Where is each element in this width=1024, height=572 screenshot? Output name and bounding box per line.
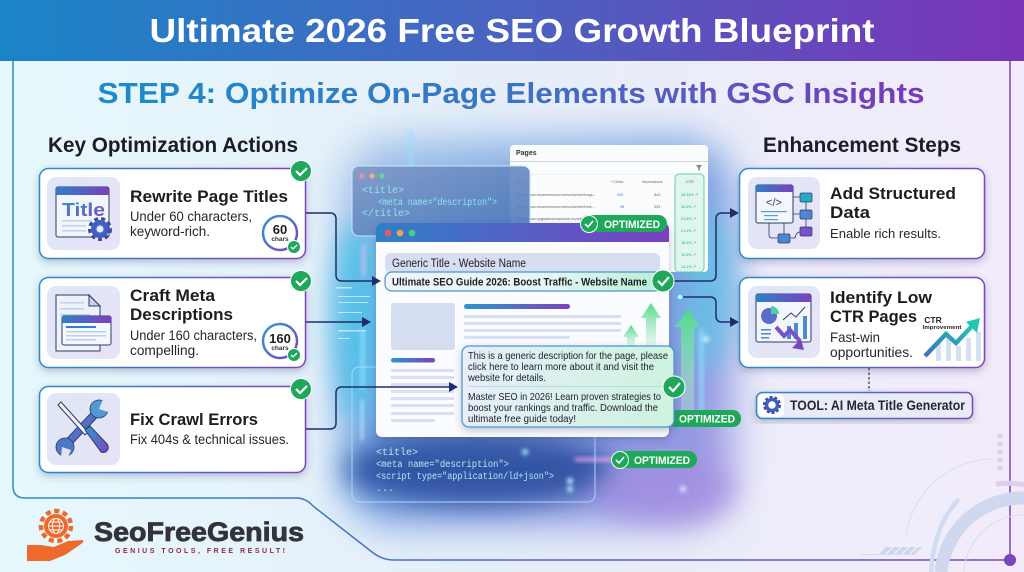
panel: GSC pages table: Pages [516, 150, 537, 157]
icon: wrench and screwdriver [47, 393, 120, 465]
generic title row [385, 253, 660, 273]
panel: bottom code editor: <meta name="description"> [376, 459, 509, 471]
panel: craft meta descriptions: Under 160 characters, [130, 327, 257, 343]
header banner [0, 0, 1024, 61]
badge: 60 chars [263, 216, 300, 254]
callout: meta description: Master SEO in 2026! Learn proven strategies to [468, 391, 661, 403]
growth arrows [623, 303, 700, 410]
check: card 1 [290, 160, 312, 182]
callout: meta description: click here to learn more about it and visit the [468, 361, 654, 373]
icon: gear [764, 397, 780, 413]
heading: key optimization actions: Key Optimization Actions [48, 134, 298, 157]
content wireframe [391, 303, 621, 422]
panel: GSC pages table: 21.1% ↗ [681, 229, 696, 233]
panel: fix crawl errors [40, 386, 306, 472]
panel: bottom code editor: ... [376, 484, 394, 495]
panel: GSC pages table: https://www.dreamzemcommerce/article/best... [516, 205, 595, 209]
panel: craft meta descriptions: Descriptions [130, 305, 233, 324]
decorative corner arcs [906, 459, 1024, 572]
badge: 60 chars: chars [271, 236, 289, 243]
check: card 3 [290, 378, 312, 400]
pill: optimized top: OPTIMIZED [604, 219, 660, 231]
logo: SeoFreeGenius [27, 511, 304, 561]
card text: Fix Crawl Errors [130, 410, 258, 429]
connector arrows [306, 213, 732, 429]
badge: 160 chars [263, 324, 300, 362]
card text: Craft Meta [130, 286, 216, 305]
panel: identify low CTR pages [740, 278, 984, 368]
icon: analytics window [748, 286, 820, 358]
check: description [663, 376, 685, 398]
panel: GSC pages table: 13.1% ↗ [681, 265, 696, 269]
panel: GSC pages table: CTR [686, 180, 694, 184]
panel: add structured data: Data [830, 203, 871, 222]
callout: meta description: This is a generic description for the page, please [468, 350, 668, 362]
icon: code flow diagram: </> [766, 197, 782, 209]
chart: CTR improvement: CTR [924, 315, 942, 325]
callout: meta description [462, 346, 674, 427]
icon: title window with gear: Title [62, 200, 105, 220]
panel: GSC pages table [510, 145, 708, 272]
panel: add structured data [740, 168, 984, 258]
panel: bottom code editor: <title> [376, 447, 418, 459]
logo: SeoFreeGenius: GENIUS TOOLS, FREE RESULT! [115, 548, 285, 555]
check: card 2 [290, 270, 312, 292]
data dots left of window [336, 287, 370, 339]
pill: optimized middle [668, 410, 741, 427]
pill: optimized middle: OPTIMIZED [679, 414, 735, 426]
panel: rewrite page titles [40, 168, 306, 258]
panel: top code editor: <title> [362, 185, 404, 197]
icon: title window with gear [47, 177, 120, 250]
callout: meta description: ultimate free guide today! [468, 413, 576, 425]
panel: GSC pages table: 15.5% ↗ [681, 253, 696, 257]
badge: 60 chars: 60 [273, 222, 287, 237]
panel: GSC pages table: 553 [654, 205, 660, 209]
panel: GSC pages table: URLs [516, 180, 526, 184]
panel: craft meta descriptions [40, 278, 306, 368]
panel: top code editor: <meta name="descripton"> [378, 197, 497, 209]
panel: bottom code editor: <script type="application/ld+json"> [376, 471, 554, 483]
callout: meta description: website for details. [467, 372, 546, 384]
card text: Identify Low [830, 288, 933, 307]
panel: rewrite page titles: Under 60 characters, [130, 208, 252, 224]
panel: GSC pages table: + Clicks [610, 180, 623, 184]
generic title row: Generic Title - Website Name [392, 258, 526, 270]
tool pill [756, 392, 972, 418]
chart: CTR improvement: Improvement [922, 325, 962, 331]
panel: identify low CTR pages: CTR Pages [830, 307, 917, 326]
chart: CTR improvement [922, 315, 981, 361]
panel: GSC pages table: https://www.upgradedomainsore.eu/article... [516, 217, 590, 221]
panel: top code editor [352, 166, 530, 236]
pill: optimized top [580, 215, 667, 232]
dotted link to tool [868, 368, 870, 391]
callout: meta description: boost your rankings and traffic. Download the [468, 402, 658, 414]
panel: GSC pages table: 98 [620, 205, 624, 209]
frame corner dot [1004, 554, 1016, 566]
icon: document with window [47, 286, 120, 359]
icon: open hand [27, 540, 83, 561]
panel: bottom code editor [352, 367, 595, 502]
badge: 160 chars: chars [271, 345, 289, 352]
card text: Add Structured [830, 184, 956, 203]
logo: SeoFreeGenius: SeoFreeGenius [94, 517, 304, 547]
panel: top code editor: </title> [362, 208, 410, 220]
central glow [332, 130, 735, 525]
heading: enhancement steps: Enhancement Steps [763, 134, 961, 157]
panel: GSC pages table: 24.8% ↗ [681, 217, 696, 221]
optimized title row: Ultimate SEO Guide 2026: Boost Traffic - Website Name [392, 276, 647, 288]
panel: GSC pages table: 18.5% ↗ [681, 241, 696, 245]
panel: GSC pages table: 843 [654, 193, 660, 197]
check: title row [652, 270, 674, 292]
connector node [677, 294, 683, 300]
decorative dots [997, 433, 1003, 471]
panel: rewrite page titles: keyword-rich. [130, 223, 210, 239]
badge: 160 chars: 160 [269, 331, 291, 346]
panel: fix crawl errors: Fix 404s & technical issues. [130, 431, 289, 447]
panel: browser window [376, 223, 669, 437]
icon: code flow diagram [748, 177, 820, 249]
panel: GSC pages table: 28.34% ↗ [681, 193, 698, 197]
subtitle: STEP 4: Optimize On-Page Elements with GSC Insights [98, 78, 924, 110]
panel: identify low CTR pages: Fast-win [830, 329, 880, 345]
panel: GSC pages table: 26.5% ↗ [681, 205, 696, 209]
panel: GSC pages table: https://www.dreamzemcommerce/article/bags... [516, 193, 596, 197]
icon: gear globe [41, 511, 71, 541]
arrowheads [362, 208, 739, 392]
panel: GSC pages table: 200 [617, 193, 623, 197]
tool pill: TOOL: AI Meta Title Generator [790, 398, 966, 413]
pill: optimized bottom: OPTIMIZED [634, 455, 690, 467]
optimized title row [385, 272, 662, 291]
panel: craft meta descriptions: compelling. [130, 342, 199, 358]
panel: identify low CTR pages: opportunities. [830, 344, 913, 360]
panel: GSC pages table: Impressions [642, 180, 663, 184]
card text: Rewrite Page Titles [130, 187, 288, 206]
panel: add structured data: Enable rich results. [830, 226, 941, 241]
title: Ultimate 2026 Free SEO Growth Blueprint [150, 12, 875, 49]
pill: optimized bottom [611, 451, 697, 468]
